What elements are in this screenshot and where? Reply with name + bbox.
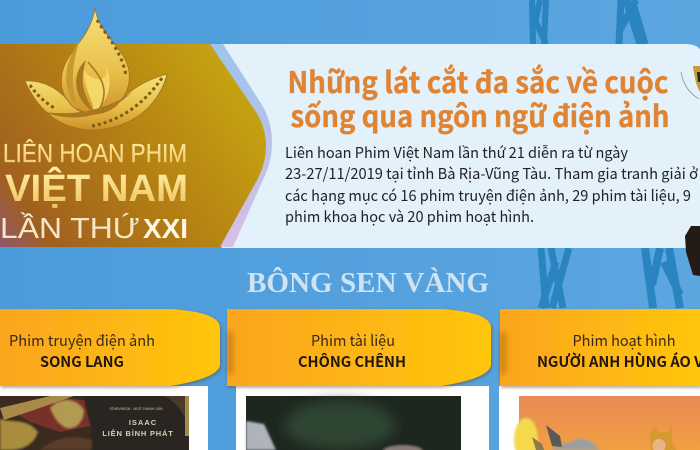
heading line 2: sống qua ngôn ngữ điện ảnh [290, 94, 670, 136]
curved band [210, 44, 272, 247]
card: documentary [227, 309, 491, 450]
header tab: SONG LANG [40, 351, 124, 372]
card: animation [499, 309, 700, 450]
decorative tower silhouettes [532, 0, 680, 308]
logo text: LẦN THỨ [0, 211, 140, 245]
header tab: Phim hoạt hình [572, 330, 676, 351]
poster: Song Lang [0, 396, 189, 450]
body text: Liên hoan Phim Việt Nam lần thứ 21 diễn ra từ ngày [285, 142, 628, 163]
icon: golden lotus [25, 8, 167, 130]
logo text: XXI [143, 213, 188, 244]
logo text [0, 139, 188, 245]
card: feature film [0, 309, 220, 450]
icon: trophy fragment [681, 66, 700, 99]
header tab [0, 309, 220, 386]
panel: festival logo [0, 8, 266, 247]
tab shadow [227, 332, 233, 374]
film perforations [97, 20, 126, 76]
poster: animation still [514, 396, 700, 450]
icon: dark figure fragment [685, 226, 700, 276]
section title: BÔNG SEN VÀNG [247, 266, 489, 299]
body text: phim khoa học và 20 phim hoạt hình. [285, 206, 534, 227]
photo: Chông Chênh [246, 396, 461, 450]
header tab: CHÔNG CHÊNH [298, 351, 406, 372]
header tab: Phim tài liệu [311, 330, 395, 351]
tab shadow [500, 332, 506, 374]
panel: intro [210, 44, 700, 248]
header tab [500, 309, 700, 386]
heading: Những lát cắt đa sắc về cuộc [288, 60, 668, 102]
petals [25, 74, 167, 130]
body text [285, 142, 698, 227]
poster: Song Lang: LIÊN BỈNH PHÁT [102, 429, 174, 438]
poster: Song Lang: ISAAC [129, 418, 157, 427]
logo text: LIÊN HOAN PHIM [3, 139, 187, 168]
body text: các hạng mục có 16 phim truyện điện ảnh, 29 phim tài liệu, 9 [285, 185, 691, 206]
poster: Song Lang: STARVISION · NGÔ THANH VÂN [109, 406, 163, 411]
drop [61, 8, 129, 116]
header tab: Phim truyện điện ảnh [9, 330, 155, 351]
body text: 23-27/11/2019 tại tỉnh Bà Rịa-Vũng Tàu. Tham gia tranh giải ở [285, 163, 698, 184]
header tab [227, 309, 491, 386]
logo text: VIỆT NAM [5, 166, 188, 210]
